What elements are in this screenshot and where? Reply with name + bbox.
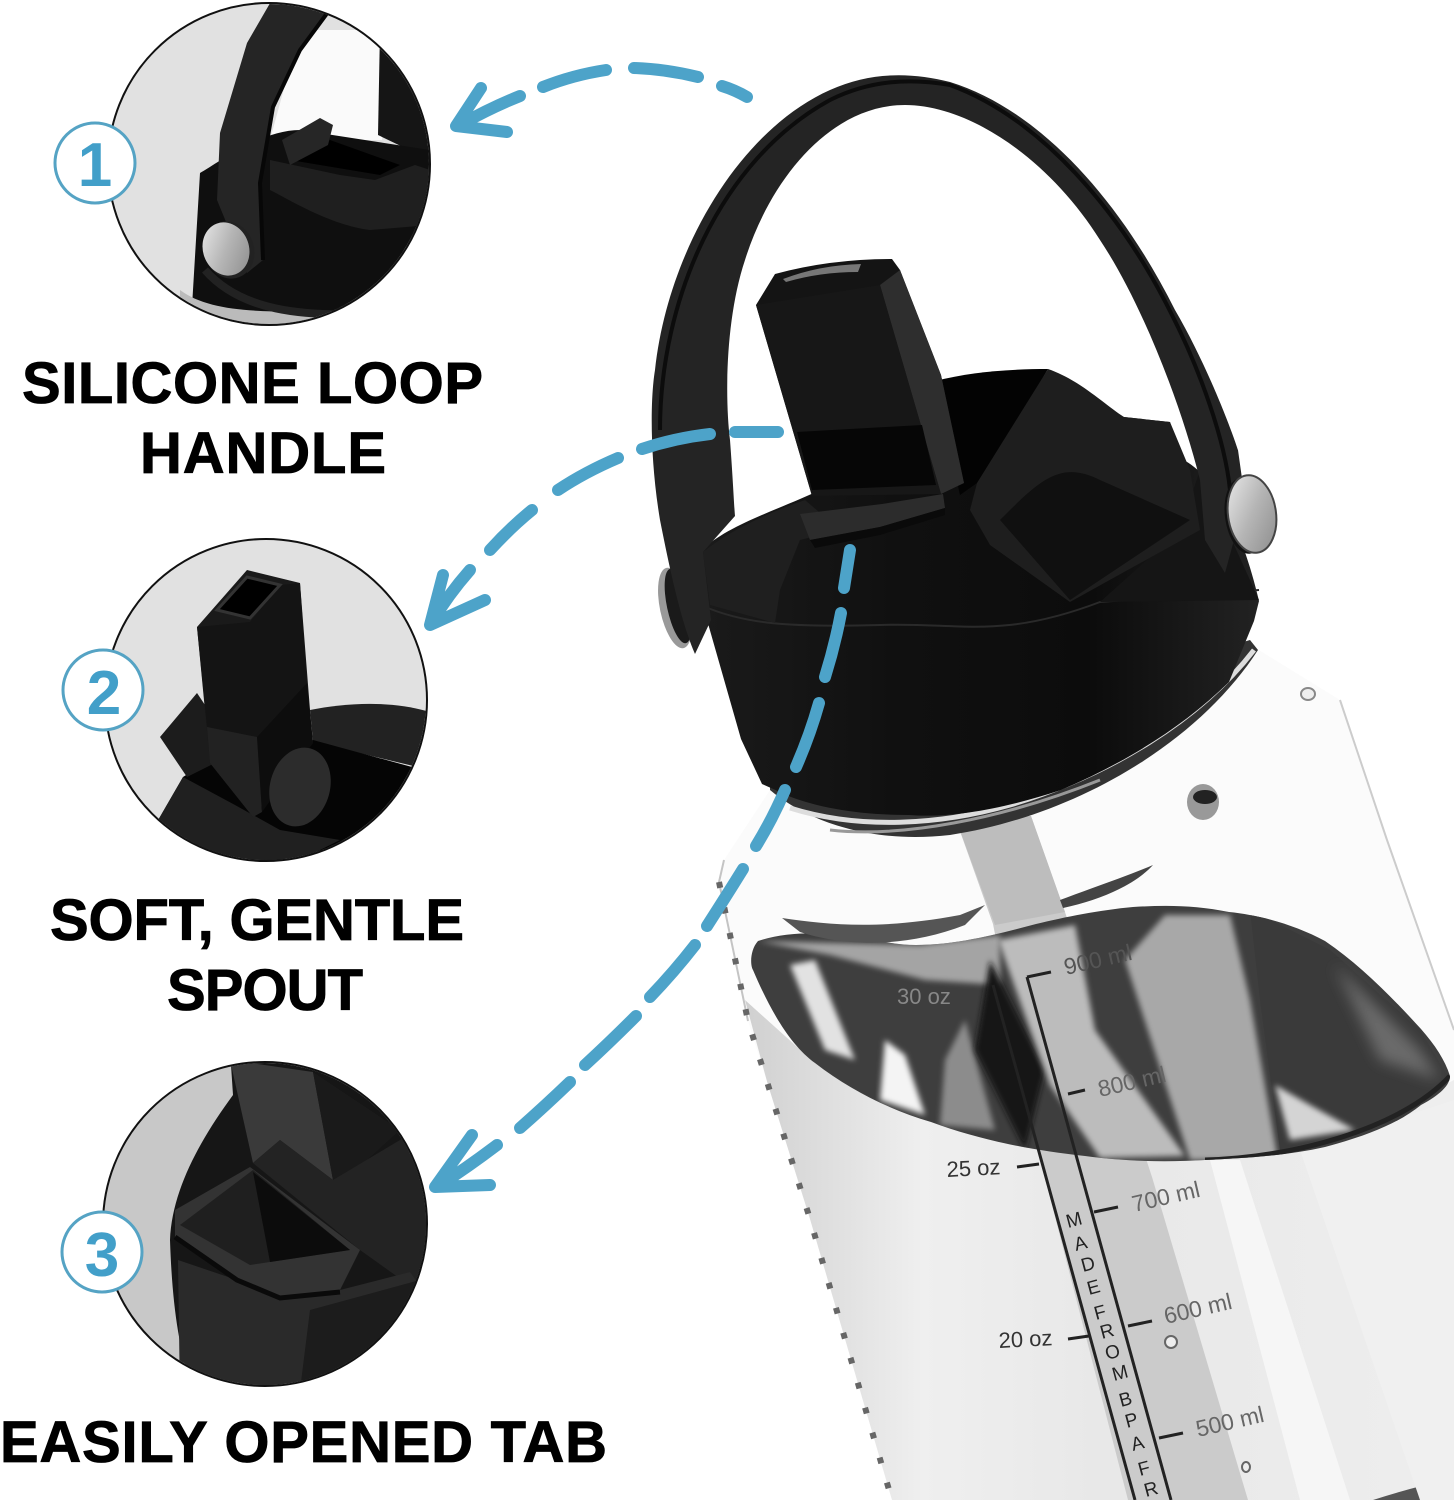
rivet — [1220, 472, 1281, 556]
upper glass reflection — [782, 865, 1153, 943]
arrow 1 — [456, 68, 747, 132]
circle 1: handle close-up — [108, 0, 430, 340]
recess and flip ridge — [935, 369, 1200, 602]
measurement scale: MADEFROMBPAFR — [1064, 1208, 1161, 1500]
badge 2 — [63, 650, 143, 730]
badge 1: 1 — [78, 131, 112, 200]
silicone loop handle — [652, 75, 1245, 654]
water surface seen from below — [740, 900, 1454, 1170]
measurement scale: 700 ml — [1129, 1176, 1202, 1217]
bottle droplets — [1165, 688, 1315, 1472]
heading: silicone loop handle: HANDLE — [140, 421, 386, 486]
straw — [956, 816, 1248, 1500]
measurement scale: 600 ml — [1161, 1288, 1234, 1329]
heading: soft gentle spout — [50, 888, 464, 1023]
measurement scale: 900 ml — [1061, 939, 1134, 980]
badge 3 — [62, 1212, 142, 1292]
arrow 2 — [430, 432, 778, 625]
measurement scale: 800 ml — [1095, 1061, 1168, 1102]
heading: soft gentle spout: SOFT, GENTLE — [50, 888, 464, 953]
heading: silicone loop handle: SILICONE LOOP — [22, 351, 483, 416]
measurement scale: 30 oz — [897, 984, 951, 1009]
heading: soft gentle spout: SPOUT — [167, 958, 363, 1023]
measurement scale: 25 oz — [946, 1154, 1001, 1182]
measurement scale: 500 ml — [1193, 1401, 1266, 1442]
silver neck rim — [770, 640, 1258, 837]
tab — [800, 494, 945, 548]
circle 2: spout close-up — [105, 539, 430, 870]
spout — [756, 259, 964, 496]
measurement scale: 20 oz — [998, 1325, 1053, 1353]
circle 3: tab close-up — [102, 1061, 428, 1387]
badge 3: 3 — [85, 1221, 119, 1290]
arrow 3 — [435, 550, 850, 1187]
badge 1 — [55, 123, 135, 203]
bottle body — [719, 647, 1454, 1500]
cap — [703, 400, 1259, 816]
handle back rivet — [652, 565, 698, 651]
heading: silicone loop handle — [22, 351, 483, 486]
heading: easily opened tab: EASILY OPENED TAB — [0, 1410, 607, 1475]
badge 2: 2 — [87, 659, 121, 728]
measurement scale — [897, 939, 1266, 1500]
